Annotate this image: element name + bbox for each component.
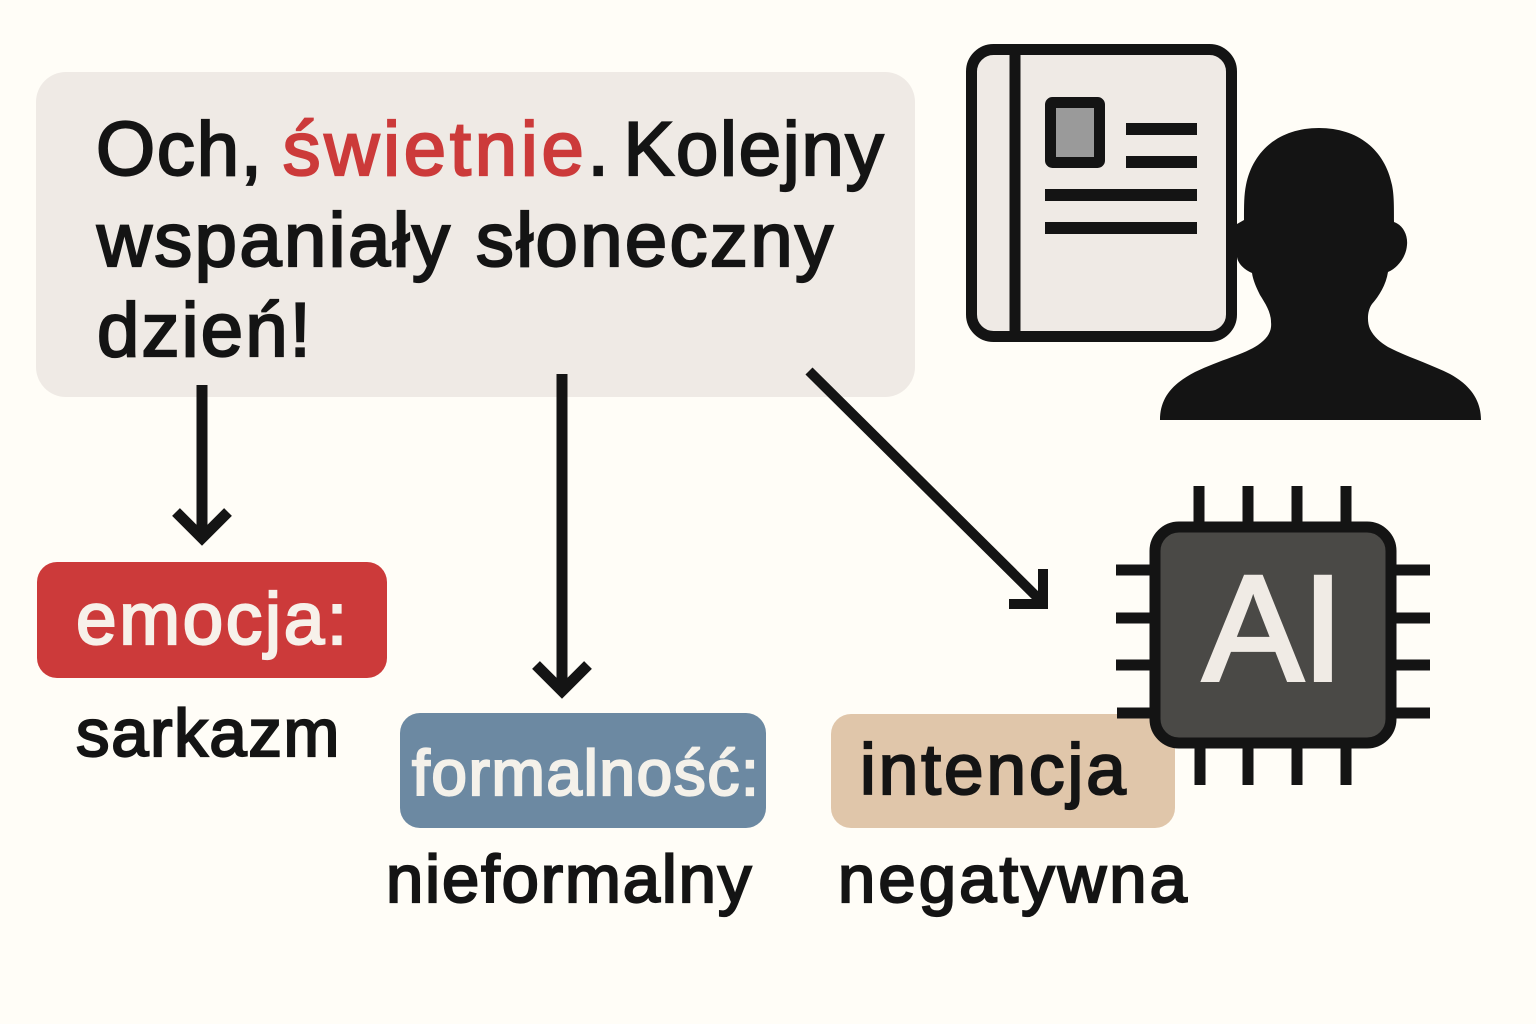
quote text: wspaniały słoneczny — [97, 198, 835, 282]
icon: AI chip: AI — [1203, 544, 1343, 712]
label: intencja — [831, 714, 1175, 828]
quote text: Och, świetnie. Kolejny — [96, 107, 885, 192]
label: formalność — [400, 713, 766, 828]
arrow: to AI — [806, 368, 1048, 609]
label text: emocja: emocja: — [76, 579, 350, 660]
arrow: to emotion — [172, 385, 232, 546]
icon: person silhouette — [1160, 128, 1481, 420]
label text: formalność: formalność: — [412, 737, 760, 809]
icon: AI chip — [1116, 486, 1430, 785]
panel: quote bubble — [36, 72, 915, 397]
quote text — [96, 107, 885, 373]
value: negatywna: negatywna — [838, 842, 1190, 917]
quote text: dzień! — [97, 288, 313, 373]
arrow: to formality — [532, 374, 592, 699]
label: emocja — [37, 562, 387, 678]
value: nieformalny: nieformalny — [386, 842, 753, 917]
icon: document — [966, 44, 1237, 342]
value: sarkazm: sarkazm — [76, 696, 341, 771]
label text: intencja: intencja — [860, 731, 1129, 810]
